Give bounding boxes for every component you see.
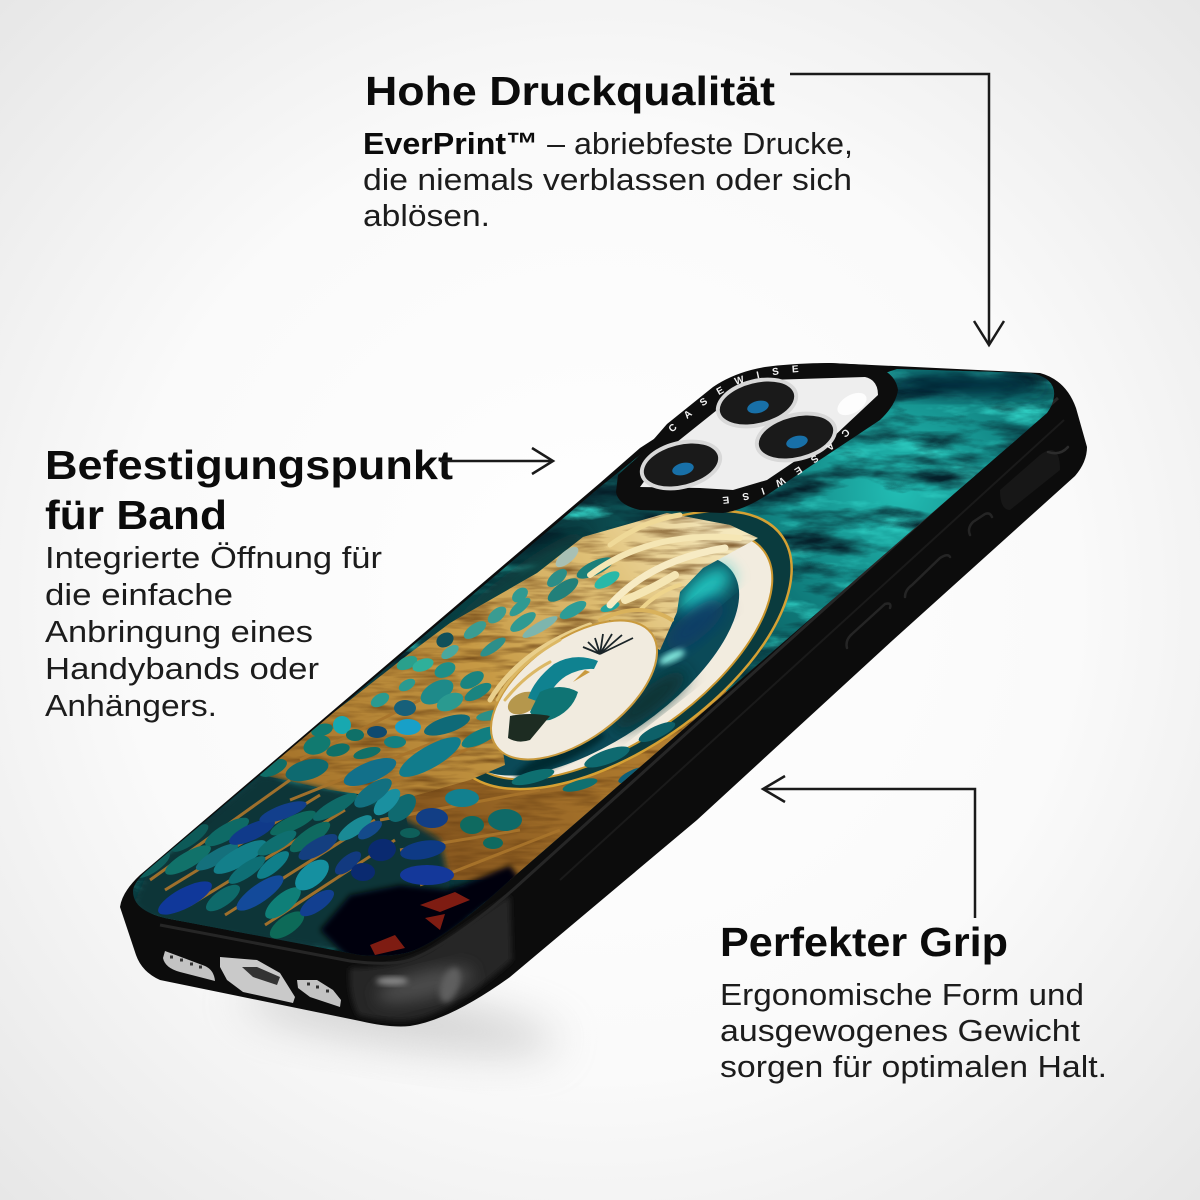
- lens: right: [749, 404, 843, 470]
- lens: upper: [710, 370, 804, 436]
- arrow: print quality: [790, 74, 1004, 345]
- body text: die niemals verblassen oder sich: [363, 162, 852, 197]
- gold ring and crescent: [472, 510, 793, 790]
- bottom ports: [163, 951, 341, 1007]
- gold veins: [150, 700, 560, 925]
- body text: Anhängers.: [45, 688, 217, 723]
- heading: [45, 442, 453, 538]
- phone case: [120, 363, 1087, 1026]
- red accents: [370, 892, 470, 955]
- case body: [120, 363, 1087, 1026]
- phone artwork: [125, 365, 1060, 960]
- body text: ausgewogenes Gewicht: [720, 1013, 1080, 1048]
- left speaker: [163, 951, 215, 981]
- glossy corner of case: [350, 895, 512, 1020]
- body text: ablösen.: [363, 198, 490, 233]
- body text: sorgen für optimalen Halt.: [720, 1049, 1107, 1084]
- usb port: [220, 957, 295, 1003]
- body text: EverPrint™ – abriebfeste Drucke,: [363, 126, 853, 161]
- case rim highlight: [160, 398, 1058, 963]
- nebula clouds: [125, 365, 1060, 960]
- callout: lanyard attachment: [45, 442, 453, 723]
- gold feathering into medallion: [497, 640, 560, 700]
- arrow: grip: [763, 776, 975, 918]
- camera frame: [616, 363, 898, 513]
- body text: Integrierte Öffnung für: [45, 540, 382, 575]
- brand text on camera ring: CASEWISE: [669, 365, 798, 432]
- heading: Befestigungspunkt: [45, 442, 453, 488]
- sky background: [125, 365, 1060, 960]
- camera island: [640, 377, 878, 490]
- body text: [45, 540, 382, 723]
- phone drop shadow: [238, 974, 562, 1066]
- camera bump: [616, 363, 898, 513]
- brand text on lower camera ring: CASEWISE: [722, 430, 850, 504]
- callout: grip: [720, 919, 1107, 1084]
- body text: Ergonomische Form und: [720, 977, 1084, 1012]
- lower gold plumage: [400, 690, 735, 880]
- callout: print quality: [363, 68, 853, 233]
- body text: [363, 126, 853, 233]
- heading: Hohe Druckqualität: [365, 68, 775, 114]
- arrow: lanyard attachment: [440, 448, 553, 474]
- right speaker: [297, 980, 341, 1007]
- heading: Perfekter Grip: [720, 919, 1008, 965]
- gold plumage: [262, 513, 758, 800]
- peacock bird: [504, 634, 633, 742]
- body text: Handybands oder: [45, 651, 319, 686]
- side buttons: [847, 447, 1068, 648]
- body text: [720, 977, 1107, 1084]
- marble medallion: [490, 620, 658, 760]
- body text: die einfache: [45, 577, 233, 612]
- lens: left: [634, 432, 728, 498]
- lower dark field: [133, 775, 450, 960]
- heading: für Band: [45, 492, 227, 538]
- peacock tail scales: [133, 543, 678, 944]
- peacock crest: [583, 634, 633, 654]
- golden feather plumes: [490, 515, 740, 720]
- flash: [834, 388, 870, 420]
- body text: Anbringung eines: [45, 614, 313, 649]
